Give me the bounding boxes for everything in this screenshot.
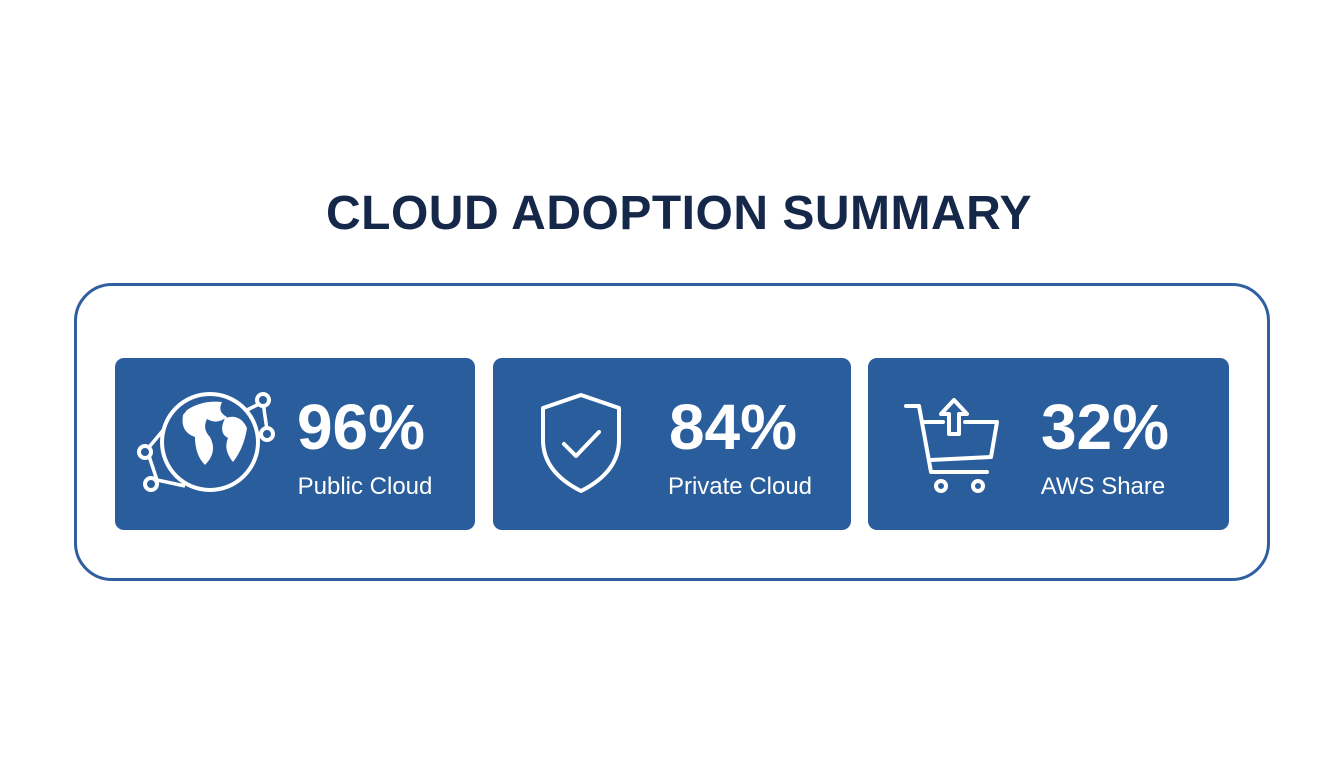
card: aws share xyxy=(868,358,1229,530)
label: Public Cloud: Public Cloud xyxy=(298,473,432,500)
stat: 84%: 84% xyxy=(669,391,797,463)
stat: 96%: 96% xyxy=(297,391,425,463)
panel: summary container xyxy=(74,283,1270,581)
title: CLOUD ADOPTION SUMMARY xyxy=(326,187,1032,240)
icon: shield check xyxy=(541,393,621,493)
label: AWS Share: AWS Share xyxy=(1041,473,1165,500)
stat: 32%: 32% xyxy=(1041,391,1169,463)
label: Private Cloud: Private Cloud xyxy=(668,473,812,500)
card: private cloud xyxy=(493,358,851,530)
icon: globe network xyxy=(137,392,275,492)
card: public cloud xyxy=(115,358,475,530)
icon: cart with upload arrow xyxy=(904,398,999,493)
